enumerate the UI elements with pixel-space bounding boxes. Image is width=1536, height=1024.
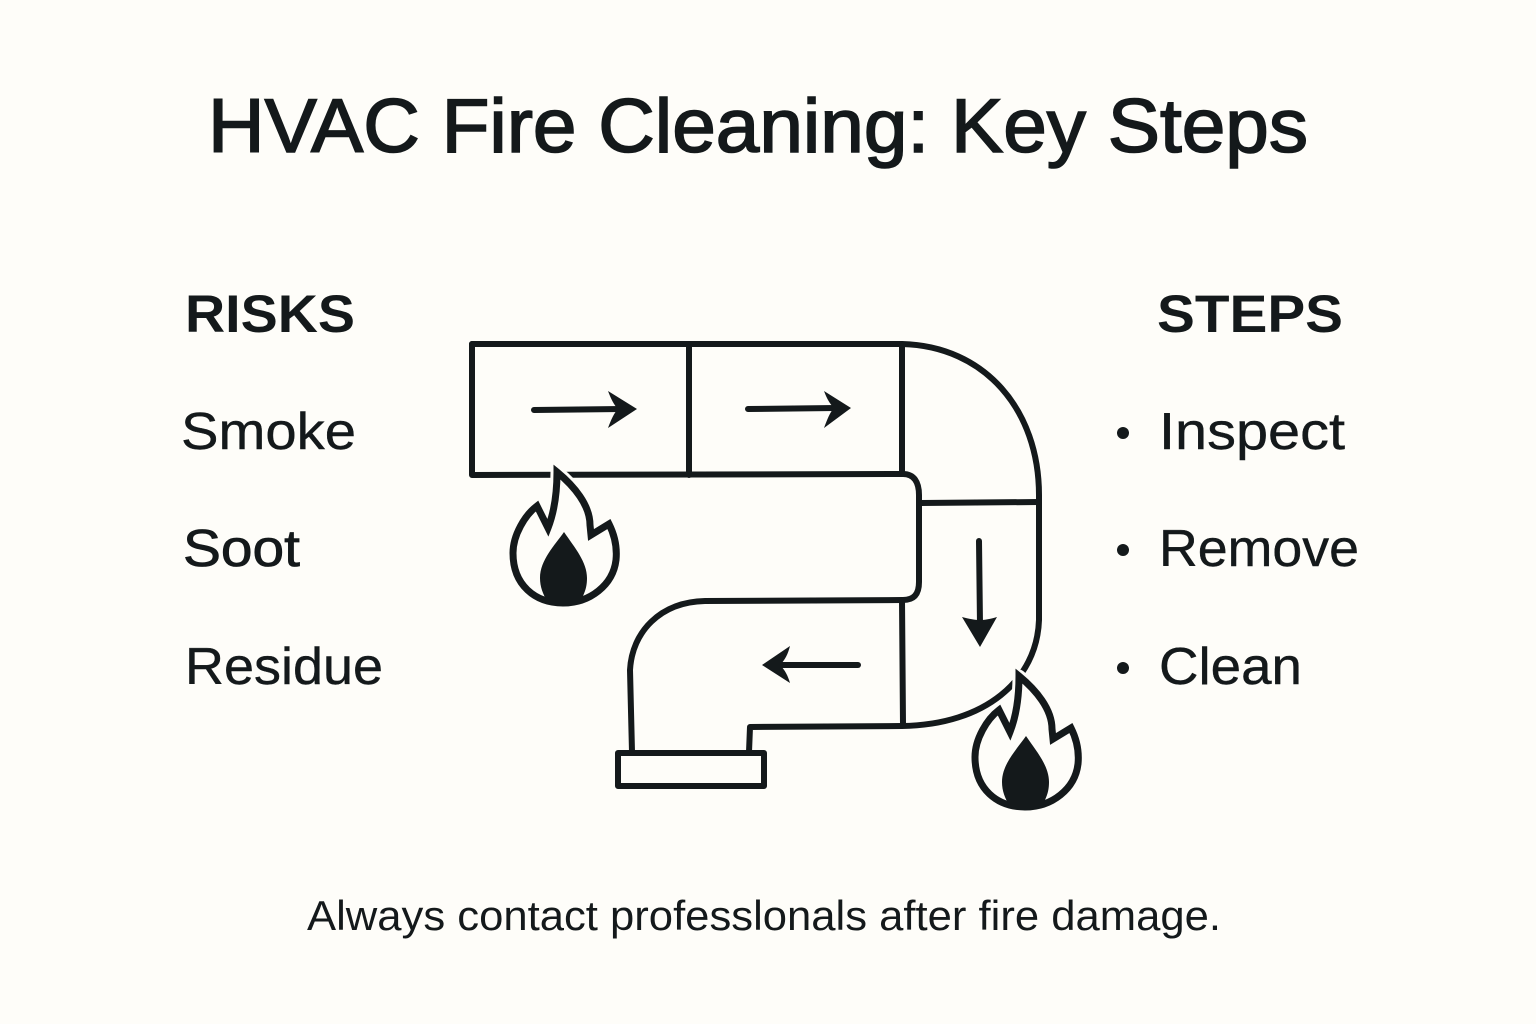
step: remove: Remove [1159, 520, 1359, 578]
panel: risks [181, 285, 383, 696]
arrow: right, first section [534, 391, 637, 428]
step: clean: Clean [1159, 638, 1302, 696]
risk: soot: Soot [183, 520, 301, 578]
heading: risks: RISKS [185, 285, 355, 344]
icon: flame right [975, 676, 1078, 807]
arrow: right, second section [748, 391, 851, 428]
duct outline [472, 344, 1039, 786]
risk: smoke: Smoke [181, 403, 356, 461]
panel: steps [1117, 285, 1359, 696]
heading: steps: STEPS [1157, 285, 1343, 344]
risk: residue: Residue [185, 638, 383, 696]
diagram: duct system [472, 344, 1078, 807]
step: inspect: Inspect [1159, 403, 1346, 461]
icon: flame left [513, 472, 616, 603]
footer note: Always contact professlonals after fire damage. [307, 892, 1221, 939]
arrow: left [762, 646, 858, 683]
arrow: down [962, 541, 997, 647]
title: HVAC Fire Cleaning: Key Steps [208, 84, 1308, 169]
